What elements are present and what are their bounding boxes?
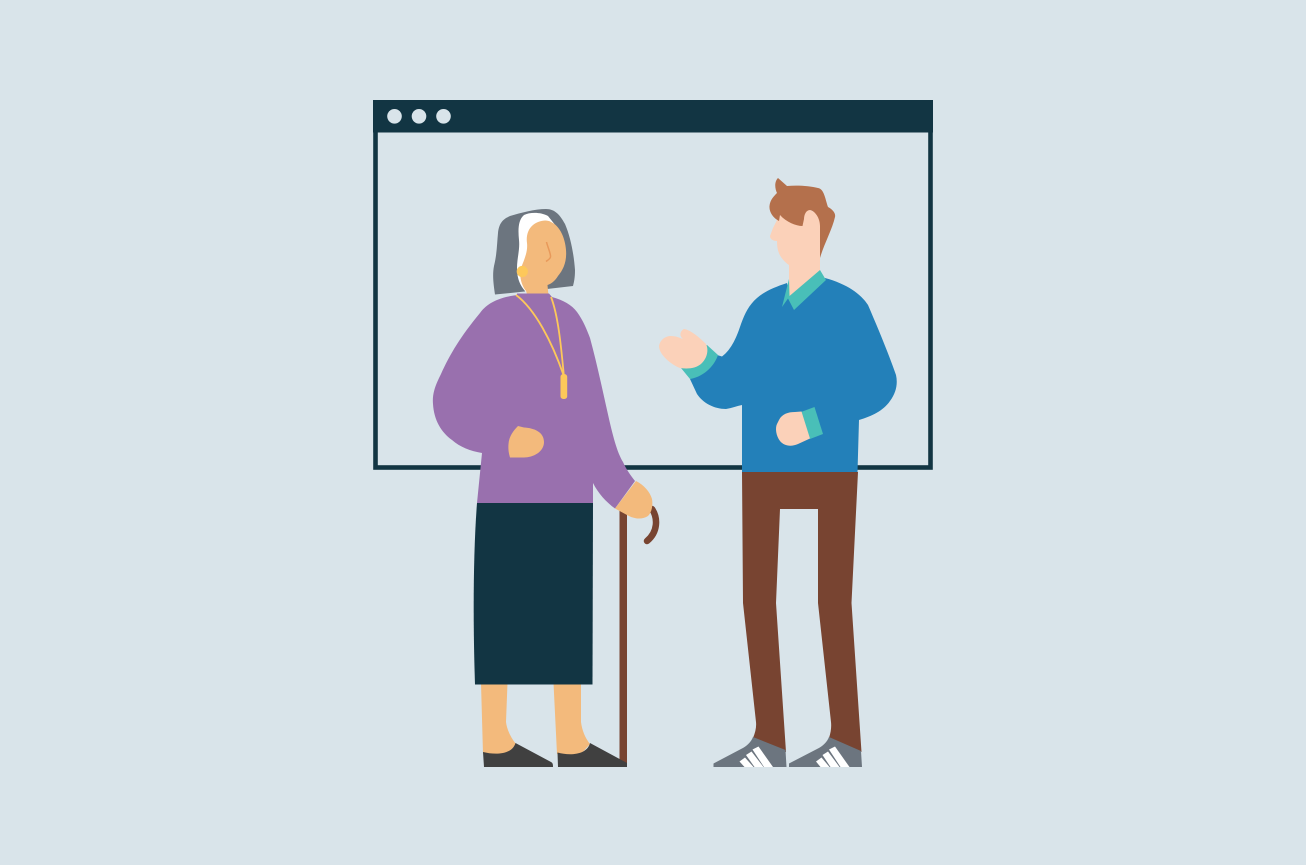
- man's neck and face: [770, 205, 820, 300]
- man's collar: [782, 270, 826, 310]
- cane handle: [647, 509, 656, 541]
- man's hair: [769, 178, 835, 258]
- woman's shoes: [483, 743, 627, 767]
- man's raised-hand cuff: [681, 345, 718, 379]
- woman's neck and face: [520, 221, 566, 296]
- shoe stripes: [740, 746, 850, 767]
- woman's hair: [493, 209, 575, 294]
- woman's legs: [481, 683, 590, 755]
- man's trousers: [742, 472, 862, 752]
- necklace pendant: [560, 374, 567, 399]
- window control dots: [387, 109, 451, 124]
- man's shoes: [714, 737, 862, 767]
- woman's hand on cane: [615, 481, 652, 519]
- woman's white hair streak: [517, 213, 556, 293]
- man's lower hand: [776, 412, 810, 446]
- cane shaft: [620, 510, 627, 765]
- woman's pocket hand: [508, 426, 544, 458]
- figure: older woman with cane: [433, 209, 656, 767]
- woman's earring: [517, 266, 528, 277]
- man's lower-hand cuff: [801, 407, 823, 439]
- man's raised hand: [659, 329, 707, 368]
- figure: younger man: [659, 178, 897, 767]
- man's blue sweater: [690, 278, 897, 472]
- woman's purple sweater: [433, 294, 635, 508]
- woman's skirt: [474, 503, 593, 684]
- window title bar: [373, 100, 933, 132]
- woman's necklace: [516, 295, 564, 375]
- browser window: [373, 100, 933, 468]
- woman's nose line: [546, 242, 551, 262]
